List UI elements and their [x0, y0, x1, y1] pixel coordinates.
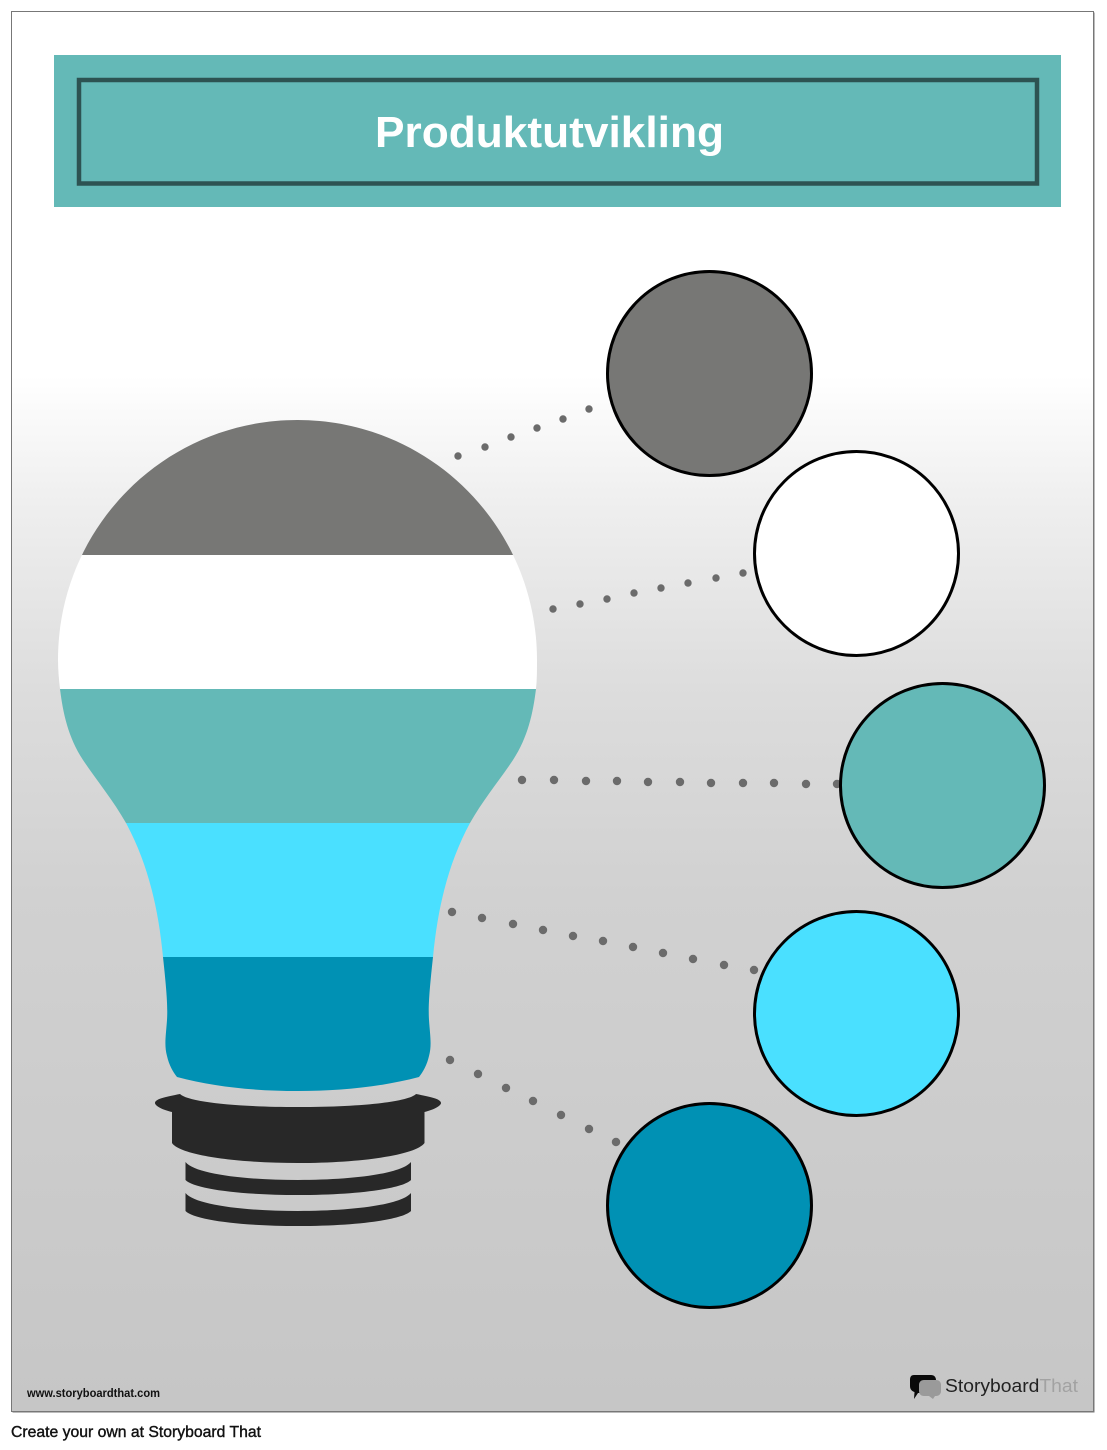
circle 1: grey [608, 272, 812, 476]
title banner [54, 55, 1061, 207]
dotted connectors [446, 405, 841, 1146]
circle 5: blue [608, 1104, 812, 1308]
bottom caption: Create your own at Storyboard That [11, 1424, 262, 1441]
circle 4: cyan [754, 912, 958, 1116]
light bulb screw base [155, 1094, 441, 1226]
circle 2: white [754, 452, 958, 656]
icon: speech bubbles [910, 1375, 941, 1399]
Storyboard That logo [910, 1375, 1078, 1399]
circle 3: teal [840, 684, 1044, 888]
logo wordmark: Storyboard That [945, 1376, 1078, 1396]
light bulb glass with five colour bands [58, 420, 537, 1091]
website footer text: www.storyboardthat.com [26, 1388, 160, 1400]
title: Produktutvikling [375, 108, 724, 157]
